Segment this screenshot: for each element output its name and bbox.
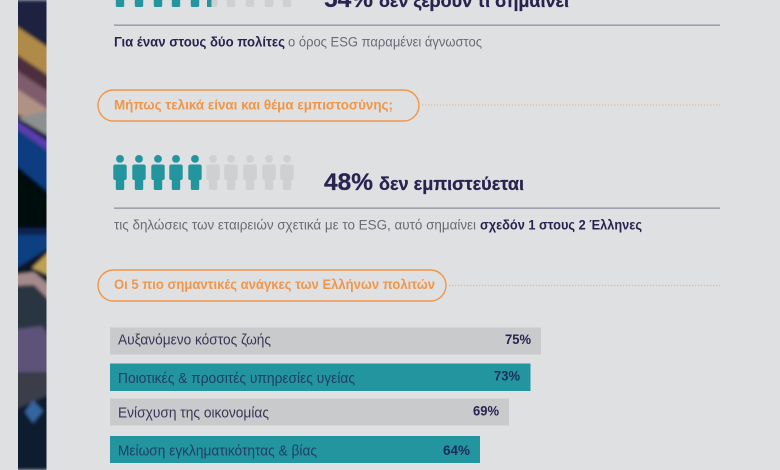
note: company statements: τις δηλώσεις των εταιρειών σχετικά με το ESG, αυτό σημαίνει <box>114 218 476 232</box>
bar: crime 64%: Μείωση εγκληματικότητας & βίας <box>118 444 317 460</box>
people partial fill <box>207 0 212 7</box>
bar: health services 73%: Ποιοτικές & προσιτές υπηρεσίες υγείας <box>118 371 355 387</box>
bar chart: needs <box>110 328 541 463</box>
note: one in two citizens: Για έναν στους δύο πολίτες <box>114 34 285 50</box>
bar: health services 73%: 73% <box>494 368 520 384</box>
stat: 48%: 48% <box>324 169 373 196</box>
bar: cost of living 75% <box>110 328 541 354</box>
bar: economy 69% <box>110 398 509 426</box>
bar: health services 73% <box>110 364 530 391</box>
note: company statements <box>114 218 642 232</box>
bar: economy 69%: Ενίσχυση της οικονομίας <box>118 406 269 422</box>
people row: 54% <box>113 0 294 7</box>
rule <box>114 208 720 209</box>
stat: 54% <box>324 0 569 13</box>
people row: 48% <box>113 155 294 190</box>
heading pill: five needs: Οι 5 πιο σημαντικές ανάγκες των Ελλήνων πολιτών <box>114 276 435 292</box>
heading pill: five needs <box>98 270 446 301</box>
heading pill: trust: Μήπως τελικά είναι και θέμα εμπιστοσύνης; <box>114 96 393 112</box>
bar: crime 64%: 64% <box>443 443 470 458</box>
note: company statements: σχεδόν 1 στους 2 Έλληνες <box>480 218 642 232</box>
bar: cost of living 75%: 75% <box>505 332 531 347</box>
heading pill: trust <box>98 90 419 121</box>
bar: economy 69%: 69% <box>473 404 499 418</box>
note: one in two citizens: ο όρος ESG παραμένει άγνωστος <box>288 34 482 50</box>
bar: cost of living 75%: Αυξανόμενο κόστος ζωής <box>118 332 271 348</box>
stat: 48% <box>324 169 524 196</box>
stat: 48%: δεν εμπιστεύεται <box>379 174 524 194</box>
note: one in two citizens <box>114 34 482 50</box>
bar: crime 64% <box>110 436 480 463</box>
rule <box>114 24 720 26</box>
decorative photo strip <box>18 0 46 470</box>
